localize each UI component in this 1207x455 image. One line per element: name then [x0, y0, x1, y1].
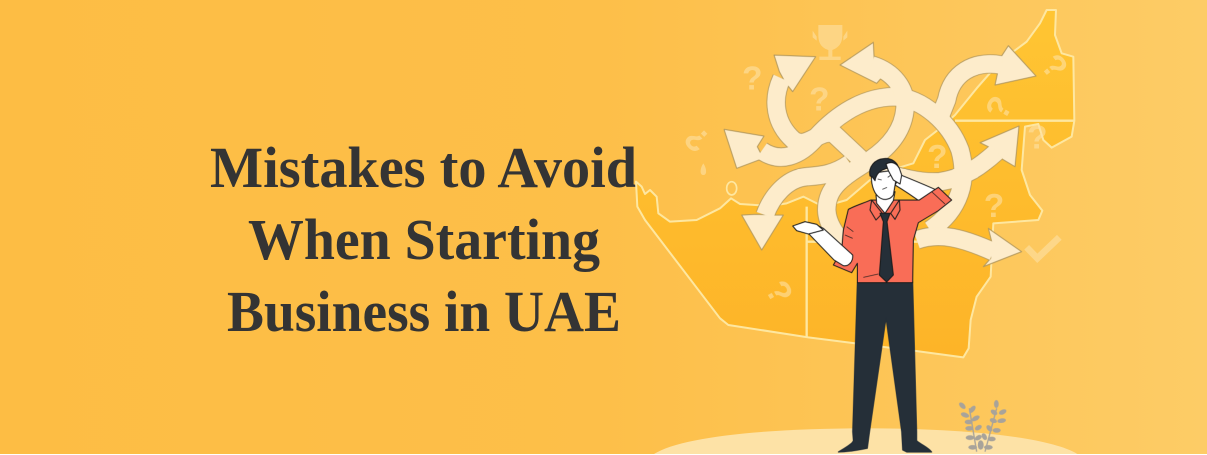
- title: [210, 135, 637, 344]
- UAE map: [636, 10, 1074, 357]
- tie: [879, 213, 893, 282]
- collar: [870, 200, 900, 220]
- check mark: [1027, 237, 1059, 258]
- title: Mistakes to Avoid: [210, 135, 637, 200]
- shirt: [833, 187, 952, 283]
- eye and mouth: [878, 175, 891, 189]
- question marks and faint icons: ?: [979, 90, 1021, 126]
- question marks and faint icons: ?: [742, 60, 763, 97]
- question marks and faint icons: ?: [1033, 47, 1075, 87]
- bottom edge line: [0, 454, 1207, 455]
- question marks and faint icons: ?: [809, 82, 830, 119]
- arrows: [724, 42, 1036, 267]
- water drop: [701, 163, 706, 175]
- question marks and faint icons: ?: [758, 274, 800, 310]
- shirt folds: [845, 192, 945, 277]
- arrow outlines: [762, 64, 1002, 252]
- face: [871, 170, 896, 199]
- question marks and faint icons: ?: [677, 119, 718, 159]
- ground ellipse: [654, 428, 1077, 454]
- raised arm: [895, 175, 935, 204]
- question marks and faint icons: ?: [1027, 120, 1048, 157]
- title: Business in UAE: [227, 279, 621, 344]
- trophy: [813, 25, 847, 60]
- man: [793, 158, 952, 452]
- plant: [958, 400, 1007, 452]
- title: When Starting: [248, 207, 600, 272]
- question marks and faint icons: ?: [927, 139, 948, 176]
- question marks and faint icons: ?: [984, 188, 1004, 225]
- island: [727, 182, 737, 195]
- arrow fills: [762, 64, 1002, 252]
- question marks and faint icons: [677, 25, 1075, 310]
- lowered arm: [808, 225, 853, 266]
- arrow heads: [724, 42, 1036, 267]
- hand on head: [886, 163, 902, 184]
- trousers: [838, 282, 932, 452]
- illustration group: [636, 10, 1077, 454]
- hand: [793, 222, 823, 234]
- hair: [870, 158, 898, 181]
- neck: [876, 192, 895, 213]
